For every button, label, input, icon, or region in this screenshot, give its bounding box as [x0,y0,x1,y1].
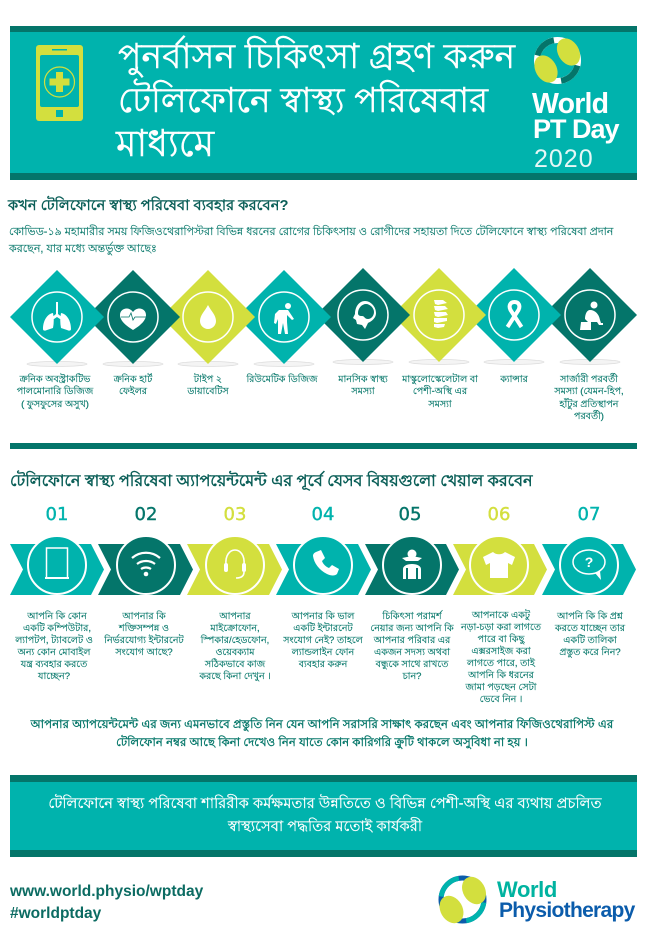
step 05: family member: বন্ধুকে সাথে রাখতে [375,659,449,670]
footer links: www.world.physio/wptday [9,883,204,900]
step 07: questions: আপনি কি কি প্রশ্ন [556,610,624,622]
item: post-surgical problems: সমস্যা (যেমন-হিপ, [553,385,624,397]
step 02: wifi: নির্ভরযোগ্য ইন্টারনেট [103,633,185,646]
step 06: clothing: আপনি কি ধরনের [467,669,535,681]
callout banner: স্বাস্থ্যসেবা পদ্ধতির মতোই কার্যকরী [227,817,423,835]
logo: World Physiotherapy: Physiotherapy [499,899,636,922]
item: musculoskeletal problems: সমস্যা [427,399,453,410]
step 02: wifi [98,504,193,658]
step 02: wifi: সংযোগ আছে? [114,647,173,658]
appointment preparation note: টেলিফোন নম্বর আছে কিনা দেখেও নিন যাতে কোন কারিগরি ক্রুটি থাকলে অসুবিধা না হয় । [116,734,528,751]
item: type 2 diabetes: টাইপ ২ [193,372,222,385]
step 03: headset: আপনার [218,611,251,622]
header banner [10,26,637,180]
title: মাধ্যমে [115,123,216,164]
intro text: কোভিড-১৯ মহামারীর সময় ফিজিওথেরাপিস্টরা বিভিন্ন ধরনের রোগের চিকিৎসায় ও রোগীদের সহায়তা দিতে টেলিফোনে স্বাস্থ্য পরিষেবা প্রদান [9,225,614,238]
step 03: headset: সঠিকভাবে কাজ [204,657,267,670]
item: musculoskeletal problems: মাস্কুলোস্কেলেটাল বা [401,372,479,385]
item: post-surgical problems: হাঁটুর প্রতিস্থাপন [559,397,620,410]
footer links [9,883,204,922]
item: cancer [467,268,561,385]
heading: before your appointment: টেলিফোনে স্বাস্থ্য পরিষেবা অ্যাপয়েন্টমেন্ট এর পূর্বে যেসব বিষয়গুলো খেয়াল করবেন [10,470,534,492]
step 03: headset: ওয়েবক্যাম [215,647,255,658]
item: type 2 diabetes: ডায়াবেটিস [186,384,229,397]
step 03: headset [187,504,282,682]
item: chronic heart failure: ক্রনিক হার্ট [113,372,153,385]
step 03: headset: করছে কিনা দেখুন । [198,670,271,682]
item: type 2 diabetes [161,270,255,397]
intro text [8,225,614,255]
step 01: device: ল্যাপটপ, ট্যাবলেট ও [14,633,93,646]
logo: World Physiotherapy [435,872,636,928]
step 02: wifi: 02 [135,504,157,525]
step 03: headset: মাইক্রোফোন, [209,622,260,634]
item: chronic obstructive pulmonary disease: পালমোনারি ডিজিজ [17,385,95,397]
title: টেলিফোনে স্বাস্থ্য পরিষেবার [118,78,489,120]
step 05: family member [365,504,459,682]
intro text: করছেন, যার মধ্যে অন্তর্ভুক্ত আছেঃ [8,242,157,255]
step 03: headset: স্পিকার/হেডফোন, [200,634,269,646]
logo: World PT Day 2020: World [532,88,608,120]
title [115,35,517,164]
step 03: headset: 03 [224,504,246,525]
appointment preparation note [30,716,614,751]
item: musculoskeletal problems: পেশী-অস্থি এর [413,384,468,397]
item: post-surgical problems [543,268,637,422]
step 07: questions: ? [585,554,593,570]
icon: smartphone with medical cross [36,45,83,121]
step 04: phone: 04 [312,504,334,525]
item: post-surgical problems: পরবর্তী) [574,409,604,422]
step 06: clothing: ভেবে নিন । [480,693,522,705]
footer links: #worldptday [10,905,102,922]
appointment preparation note: আপনার অ্যাপয়েন্টমেন্ট এর জন্য এমনভাবে প্রস্তুতি নিন যেন আপনি সরাসরি সাক্ষাৎ করছেন এবং আপনার ফিজিওথেরাপিস্ট এর [30,716,614,733]
step 01: device: যন্ত্র ব্যবহার করতে [20,659,88,670]
step 04: phone: ব্যবহার করুন [298,659,349,670]
step 07: questions: প্রস্তুত করে নিন? [559,646,621,658]
step 05: family member: চান? [402,671,421,682]
item: cancer: ক্যান্সার [499,374,529,385]
logo: World PT Day 2020 [530,34,620,173]
step 04: phone: একটি ইন্টারনেট [293,621,354,634]
logo: World PT Day 2020: 2020 [534,145,594,173]
item: post-surgical problems: সার্জারী পরবর্তী [559,372,618,385]
step 07: questions [542,504,636,658]
callout banner [10,775,637,857]
item: mental health problems [316,268,410,397]
title: পুনর্বাসন চিকিৎসা গ্রহণ করুন [118,35,517,78]
step 06: clothing: নড়া-চড়া করা লাগতে [460,622,542,633]
item: chronic obstructive pulmonary disease: ( ফুসফুসের অসুখ) [21,399,89,410]
item: mental health problems: মানসিক স্বাস্থ্য [337,373,389,385]
step row [10,504,636,705]
callout banner: টেলিফোনে স্বাস্থ্য পরিষেবা শারিরীক কর্মক্ষমতার উন্নতিতে ও বিভিন্ন পেশী-অস্থি এর ব্যথায় প্রচলিত [48,794,603,812]
step 05: family member: একজন সদস্য অথবা [374,647,451,658]
item: chronic obstructive pulmonary disease: ক্রনিক অবস্ট্রাকটিভ [19,372,91,385]
step 06: clothing [453,504,547,705]
item: chronic obstructive pulmonary disease [10,270,104,410]
item: rheumatic disease [237,270,331,385]
step 02: wifi: শক্তিসম্পন্ন ও [118,622,169,634]
step 01: device: একটি কম্পিউটার, [23,621,91,634]
step 04: phone [276,504,371,670]
item: chronic heart failure [86,270,180,397]
diamond row [10,268,637,422]
step 06: clothing: আপনাকে একটু [471,608,531,621]
item: chronic heart failure: ফেইলর [119,385,148,397]
step 04: phone: ল্যান্ডলাইন ফোন [291,646,356,658]
step 01: device: আপনি কি কোন [26,610,88,622]
step 06: clothing: এক্সরসাইজ করা [471,645,532,657]
step 01: device [10,504,104,682]
step 04: phone: আপনার কি ভাল [291,610,355,622]
step 05: family member: 05 [399,504,421,525]
step 05: family member: চিকিৎসা পরামর্শ [381,610,443,622]
heading: when to use telehealth: কখন টেলিফোনে স্বাস্থ্য পরিষেবা ব্যবহার করবেন? [7,195,288,214]
step 01: device: যাচ্ছেন? [37,671,70,682]
item: rheumatic disease: রিউমেটিক ডিজিজ [245,372,319,385]
logo: World PT Day 2020: PT Day [533,114,620,144]
step 02: wifi: আপনার কি [121,610,167,622]
step 04: phone: সংযোগ নেই? তাহলে [282,634,364,646]
step 01: device: 01 [46,504,68,525]
logo: World Physiotherapy: World [497,877,557,902]
step 06: clothing: 06 [488,504,510,525]
step 06: clothing: লাগতে পারে, তাই [466,657,536,669]
step 05: family member: আপনার পরিবার এর [373,634,451,646]
step 01: device: অন্য কোন মোবাইল [17,646,91,658]
step 07: questions: করতে যাচ্ছেন তার [554,623,626,634]
step 07: questions: একটি তালিকা [563,633,618,646]
step 05: family member: নেয়ার জন্য আপনি কি [370,622,455,634]
item: musculoskeletal problems [392,268,486,410]
item: mental health problems: সমস্যা [350,386,376,397]
step 06: clothing: জামা পড়ছেন সেটা [464,680,538,693]
step 06: clothing: পারে বা কিছু [478,633,526,645]
step 07: questions: 07 [578,504,600,525]
